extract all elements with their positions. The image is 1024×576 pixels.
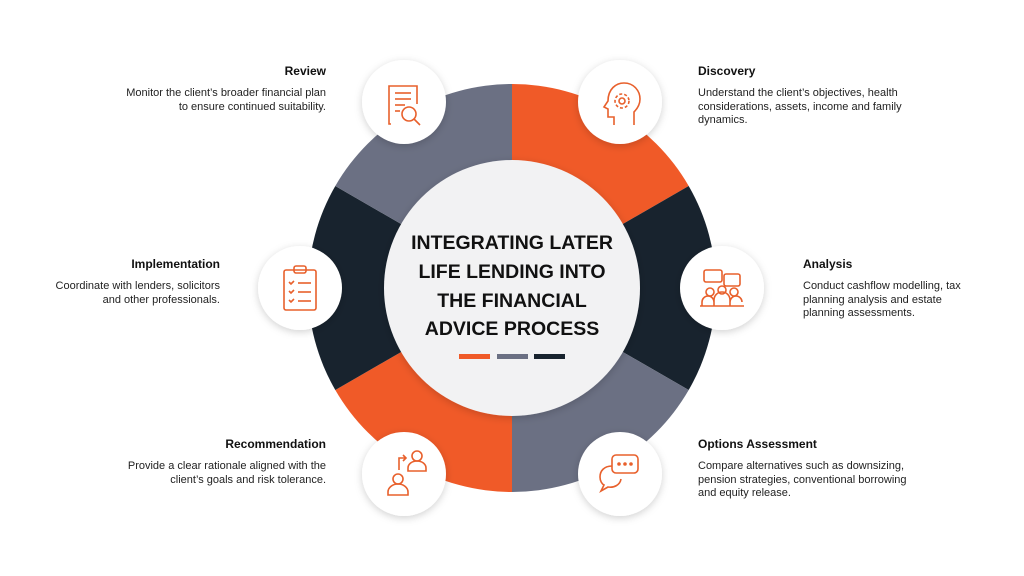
icon: analysis people — [680, 246, 764, 330]
center circle — [384, 160, 640, 416]
text: options assessment: Compare alternatives such as downsizing, — [698, 460, 904, 472]
text: recommendation: client’s goals and risk tolerance. — [170, 474, 326, 486]
text: discovery — [698, 64, 902, 126]
icon: review document — [362, 60, 446, 144]
text: analysis: planning assessments. — [803, 307, 915, 319]
colour bars — [459, 354, 565, 359]
text: analysis — [803, 257, 961, 319]
text: options assessment — [698, 437, 907, 499]
text: review — [126, 64, 326, 113]
text: options assessment: pension strategies, conventional borrowing — [698, 474, 907, 486]
text: analysis: planning analysis and estate — [803, 294, 942, 306]
text: implementation — [56, 257, 220, 306]
title: INTEGRATING LATER — [411, 232, 613, 254]
text: analysis: Conduct cashflow modelling, tax — [803, 280, 961, 292]
title: THE FINANCIAL — [437, 290, 587, 312]
text: discovery: Understand the client’s objectives, health — [698, 87, 898, 99]
segment: discovery orange — [512, 84, 689, 288]
text: implementation: Implementation — [131, 257, 220, 271]
segment: review gray — [335, 84, 512, 288]
text: options assessment: and equity release. — [698, 487, 791, 499]
text: discovery: Discovery — [698, 64, 755, 78]
segment: implementation dark — [308, 186, 512, 390]
text: implementation: and other professionals. — [103, 294, 220, 306]
text: recommendation: Recommendation — [225, 437, 326, 451]
text: implementation: Coordinate with lenders, solicitors — [56, 280, 220, 292]
icon: options speech bubbles — [578, 432, 662, 516]
title: LIFE LENDING INTO — [418, 261, 606, 283]
text: discovery: considerations, assets, income and family — [698, 101, 902, 113]
title — [411, 232, 613, 340]
segment: recommendation orange — [335, 288, 512, 492]
icon: recommendation people — [362, 432, 446, 516]
text: review: Review — [285, 64, 326, 78]
text: review: Monitor the client’s broader financial plan — [126, 87, 326, 99]
text: analysis: Analysis — [803, 257, 852, 271]
text: options assessment: Options Assessment — [698, 437, 817, 451]
icon: implementation clipboard — [258, 246, 342, 330]
text: discovery: dynamics. — [698, 114, 748, 126]
text: review: to ensure continued suitability. — [179, 101, 326, 113]
icon: discovery head — [578, 60, 662, 144]
title: ADVICE PROCESS — [425, 318, 599, 340]
segment: analysis dark — [512, 186, 716, 390]
segment: options gray — [512, 288, 689, 492]
text: recommendation — [128, 437, 326, 486]
text: recommendation: Provide a clear rationale aligned with the — [128, 460, 326, 472]
